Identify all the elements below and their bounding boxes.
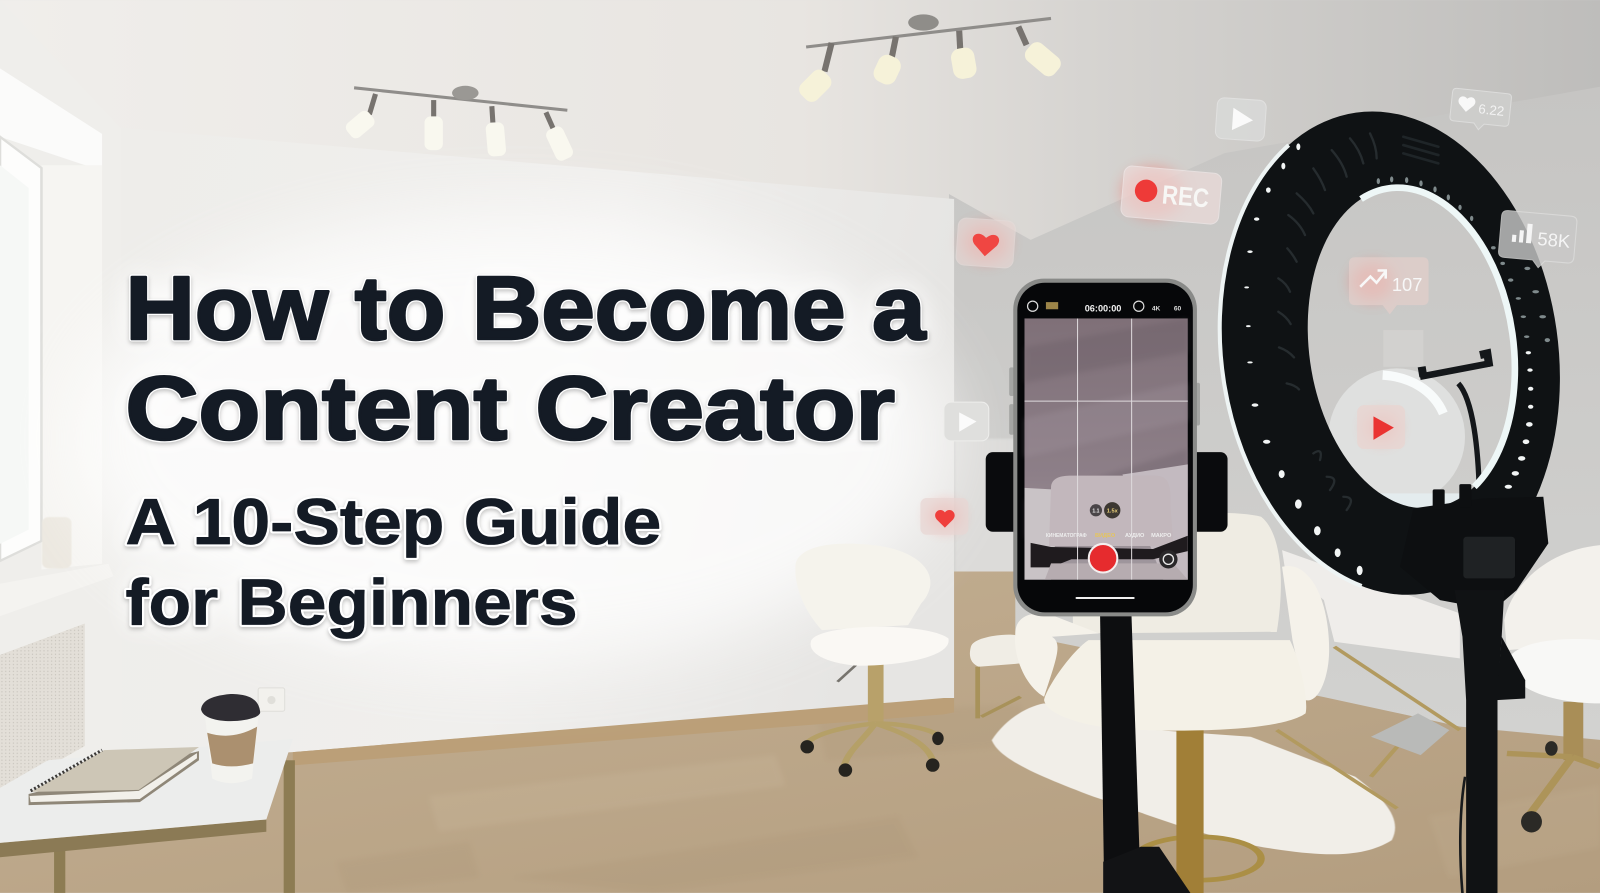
red play panel [1357,405,1405,449]
white armchair and bench [970,513,1460,893]
floating card: REC [1120,165,1222,225]
floating card: white play top [1215,97,1267,142]
wall stripes in viewfinder [1024,318,1188,539]
phone stand pole [1100,613,1141,893]
background: right wall [949,87,1600,745]
window wall [0,0,121,826]
coffee cup [201,694,260,783]
camera modes: ВИДЕО [1095,533,1116,539]
bed on screen [1024,488,1061,580]
floating bubble: 58K views: 58K [1537,228,1572,252]
REC card panel [1120,165,1222,225]
left light mount [452,86,479,100]
control display [1463,537,1515,578]
title line 1: How to Become a [126,259,927,359]
right ceiling light [796,14,1064,105]
home bar [1076,597,1135,599]
chair back [1073,513,1281,633]
background: hallway [955,439,1016,577]
chair pedestal [1176,730,1204,893]
notebook and table [0,694,295,893]
radiator [0,624,85,794]
chair arm left [1015,613,1099,697]
ring stand pole [1455,590,1525,893]
right chair [1504,545,1600,832]
red play glyph [1373,416,1394,440]
title glow: How to Become a [126,259,927,359]
REC label: REC [1161,179,1210,213]
background: ceiling [0,0,1600,306]
floating card: red play [1357,405,1405,449]
camera status icons [1028,301,1182,312]
growth arrow [1360,270,1386,287]
bench behind chair [1282,550,1460,658]
camera timer: 06:00:00 [1085,303,1121,313]
table top edge [0,819,266,857]
window [0,137,41,561]
cushion on screen [1049,476,1173,546]
title glow [126,259,927,639]
mirror reflection in ring [1328,330,1500,513]
camera modes: КИНЕМАТОГРАФ [1046,533,1087,539]
control knobs [1433,484,1471,509]
ottoman [970,635,1021,667]
smartphone [1009,279,1200,616]
white stool chair [795,544,949,777]
left ceiling light [343,86,575,163]
small heart panel [920,498,968,535]
camera status icons: 4K [1152,305,1161,312]
phone holder behind ring [1420,353,1490,493]
floating bubble: 58K views [1497,210,1577,271]
floating card: small red heart [920,498,968,535]
window frame inner [0,165,29,544]
zoom selector: 1.1 [1092,508,1100,514]
growth bubble panel [1349,257,1429,314]
camera modes [1046,533,1172,539]
ring power cable [1460,777,1465,893]
heart glyph [972,233,1000,257]
floating card: white play left [944,402,989,441]
chair foot ring [1136,837,1261,880]
subtitle line 2: for Beginners [126,566,578,639]
baseboard [293,698,954,765]
record button [1089,544,1117,573]
notebook [29,747,199,805]
camera flip icon [1159,550,1178,568]
ring LED dots bright [1244,143,1533,575]
viewfinder [1024,318,1188,580]
soft light on wall behind title [71,214,949,663]
right light mount [908,14,939,31]
title [126,259,927,639]
floating bubble: 107 growth [1349,257,1429,314]
camera modes: МАКРО [1151,533,1172,539]
background: floor [0,572,1600,893]
grid lines [1024,318,1188,580]
floating bubble: likes 6.22: 6.22 [1478,101,1505,119]
zoom selector: 1.5x [1107,508,1119,514]
camera status icons: 60 [1174,305,1182,312]
title line 2: Content Creator [126,359,895,459]
camera modes: АУДИО [1125,533,1145,539]
bench legs [1277,647,1460,808]
title glow: for Beginners [126,566,578,639]
ring body [1189,89,1590,617]
growth value: 107 [1392,274,1422,295]
table legs [54,760,295,893]
ring control box [1400,484,1548,610]
title glow: Content Creator [126,359,895,459]
floor planks [337,704,1600,893]
chair arm right [1282,566,1329,700]
floating bubble: likes 6.22 [1449,88,1512,133]
heart card panel [956,218,1016,268]
ring LED dots dim [1377,176,1550,342]
phone side buttons [1009,367,1200,435]
tripod clamp [1103,847,1191,893]
window sill [0,564,114,616]
REC dot [1134,179,1158,203]
chair seat [1044,640,1306,731]
ring inner white rim [1360,174,1533,497]
floating card: red heart [956,218,1016,268]
subtitle line 1: A 10-Step Guide [126,485,661,558]
title glow: A 10-Step Guide [126,485,661,558]
black bar on screen [1031,536,1188,567]
tablet on floor [1371,713,1449,755]
zoom selector [1090,502,1120,518]
wall socket [258,688,285,711]
table top [0,739,293,843]
fluffy white rug [992,703,1395,854]
ring outer white rim [1192,144,1362,601]
small heart glyph [935,510,955,528]
bottle on sill [42,517,71,568]
ring ribs and vents [1278,133,1438,510]
background: main wall [117,128,954,765]
phone clamps [986,452,1228,532]
